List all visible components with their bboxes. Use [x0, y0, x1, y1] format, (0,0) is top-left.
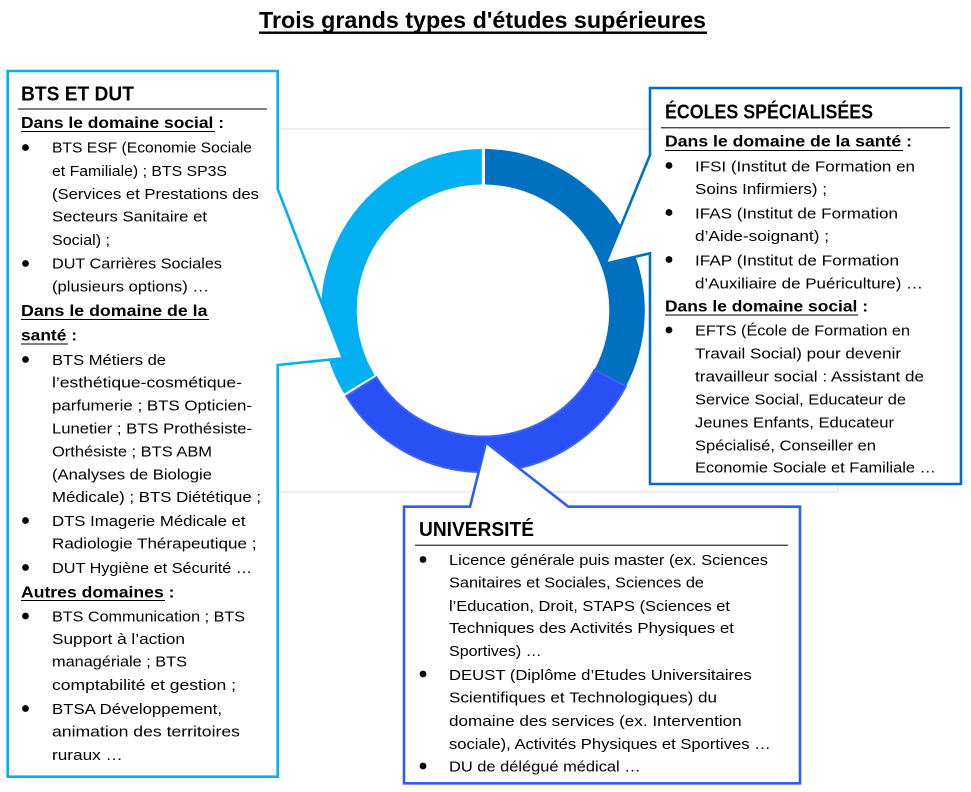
list: domaine social: EFTS (École de Formation en: [695, 323, 910, 340]
list: domaine de la santé: Radiologie Thérapeutique ;: [52, 536, 256, 552]
chart frame: [270, 129, 838, 492]
list: université: [420, 552, 771, 776]
subheading: domaine de la santé: Dans le domaine de la: [21, 303, 208, 320]
list: domaine social: Spécialisé, Conseiller en: [695, 438, 876, 455]
list: autres domaines: Support à l’action: [52, 631, 185, 648]
list: domaine de la santé: Lunetier ; BTS Prothésiste-: [52, 421, 252, 438]
list: domaine social: [666, 323, 936, 477]
list: domaine de la santé: Soins Infirmiers) ;: [695, 181, 827, 198]
list: domaine social: (plusieurs options) …: [52, 278, 209, 296]
list: domaine de la santé: [22, 352, 261, 577]
list: domaine de la santé: d’Aide-soignant) ;: [695, 228, 829, 245]
list: autres domaines: BTS Communication ; BTS: [52, 609, 245, 626]
list: domaine de la santé: BTS Métiers de: [52, 352, 166, 369]
list: autres domaines: comptabilité et gestion ;: [52, 677, 236, 694]
list: domaine social: DUT Carrières Sociales: [52, 256, 222, 272]
list: domaine de la santé: IFAP (Institut de Formation: [695, 253, 899, 270]
panel: écoles spécialisées: [606, 88, 961, 484]
callout shape: [404, 442, 800, 783]
list: université: l’Education, Droit, STAPS (Sciences et: [449, 598, 731, 615]
list: université: Scientifiques et Technologiques) du: [449, 690, 717, 707]
segment: université: [346, 370, 626, 472]
list: domaine de la santé: IFSI (Institut de Formation en: [695, 159, 915, 176]
list: université: Licence générale puis master (ex. Sciences: [449, 552, 768, 569]
panel: université: [404, 442, 800, 783]
list: domaine social: [22, 140, 259, 296]
list: domaine social: et Familiale) ; BTS SP3S: [52, 163, 227, 180]
list: autres domaines: ruraux …: [52, 747, 123, 764]
subheading: domaine social: Dans le domaine social :: [665, 299, 868, 316]
list: domaine social: Secteurs Sanitaire et: [52, 209, 208, 226]
list: domaine social: Economie Sociale et Familiale …: [695, 460, 936, 477]
subheading: domaine de la santé: [21, 303, 209, 345]
title: Trois grands types d'études supérieures: [259, 7, 706, 33]
subheading: autres domaines: Autres domaines :: [21, 584, 174, 601]
list: domaine de la santé: [666, 159, 923, 292]
list: domaine social: BTS ESF (Economie Sociale: [52, 140, 252, 157]
list: domaine social: (Services et Prestations des: [52, 186, 259, 203]
panel: BTS et DUT: [8, 71, 343, 777]
list: université: DEUST (Diplôme d’Etudes Universitaires: [449, 667, 752, 684]
list: domaine de la santé: Orthésiste ; BTS ABM: [52, 444, 212, 461]
list: université: DU de délégué médical …: [449, 759, 641, 776]
list: université: Sportives) …: [449, 643, 542, 660]
list: domaine social: Travail Social) pour devenir: [695, 345, 901, 362]
segment: écoles spécialisées: [485, 149, 645, 386]
list: domaine de la santé: DUT Hygiène et Sécurité …: [52, 560, 252, 577]
list: autres domaines: BTSA Développement,: [52, 701, 222, 718]
list: université: Sanitaires et Sociales, Sciences de: [449, 575, 704, 592]
segment: BTS et DUT: [321, 149, 482, 394]
list: autres domaines: [22, 609, 245, 764]
list: domaine de la santé: (Analyses de Biologie: [52, 466, 212, 483]
heading: ÉCOLES SPÉCIALISÉES: [665, 100, 873, 123]
subheading: domaine social: Dans le domaine social :: [21, 115, 224, 132]
list: université: domaine des services (ex. Intervention: [449, 713, 742, 730]
list: domaine de la santé: Médicale) ; BTS Diététique ;: [52, 489, 261, 506]
list: université: Techniques des Activités Physiques et: [449, 620, 735, 637]
list: domaine de la santé: IFAS (Institut de Formation: [695, 205, 898, 222]
list: domaine social: Service Social, Educateur de: [695, 391, 906, 408]
subheading: domaine de la santé: santé :: [21, 328, 77, 345]
donut chart: [321, 149, 645, 472]
list: domaine de la santé: l’esthétique-cosmétique-: [52, 375, 242, 392]
list: domaine social: travailleur social : Assistant de: [695, 369, 924, 386]
callout shape: [8, 71, 343, 777]
list: autres domaines: animation des territoires: [52, 724, 240, 741]
subheading: domaine de la santé: Dans le domaine de la santé :: [665, 134, 912, 151]
heading: UNIVERSITÉ: [419, 518, 534, 541]
list: domaine social: Social) ;: [52, 232, 110, 249]
list: domaine social: Jeunes Enfants, Educateur: [695, 415, 894, 432]
list: université: sociale), Activités Physiques et Sportives …: [449, 736, 771, 753]
list: domaine de la santé: DTS Imagerie Médicale et: [52, 513, 246, 530]
list: domaine de la santé: d’Auxiliaire de Puériculture) …: [695, 275, 923, 292]
heading: BTS ET DUT: [21, 84, 134, 106]
list: domaine de la santé: parfumerie ; BTS Opticien-: [52, 398, 252, 415]
callout shape: [606, 88, 961, 484]
list: autres domaines: managériale ; BTS: [52, 654, 187, 671]
